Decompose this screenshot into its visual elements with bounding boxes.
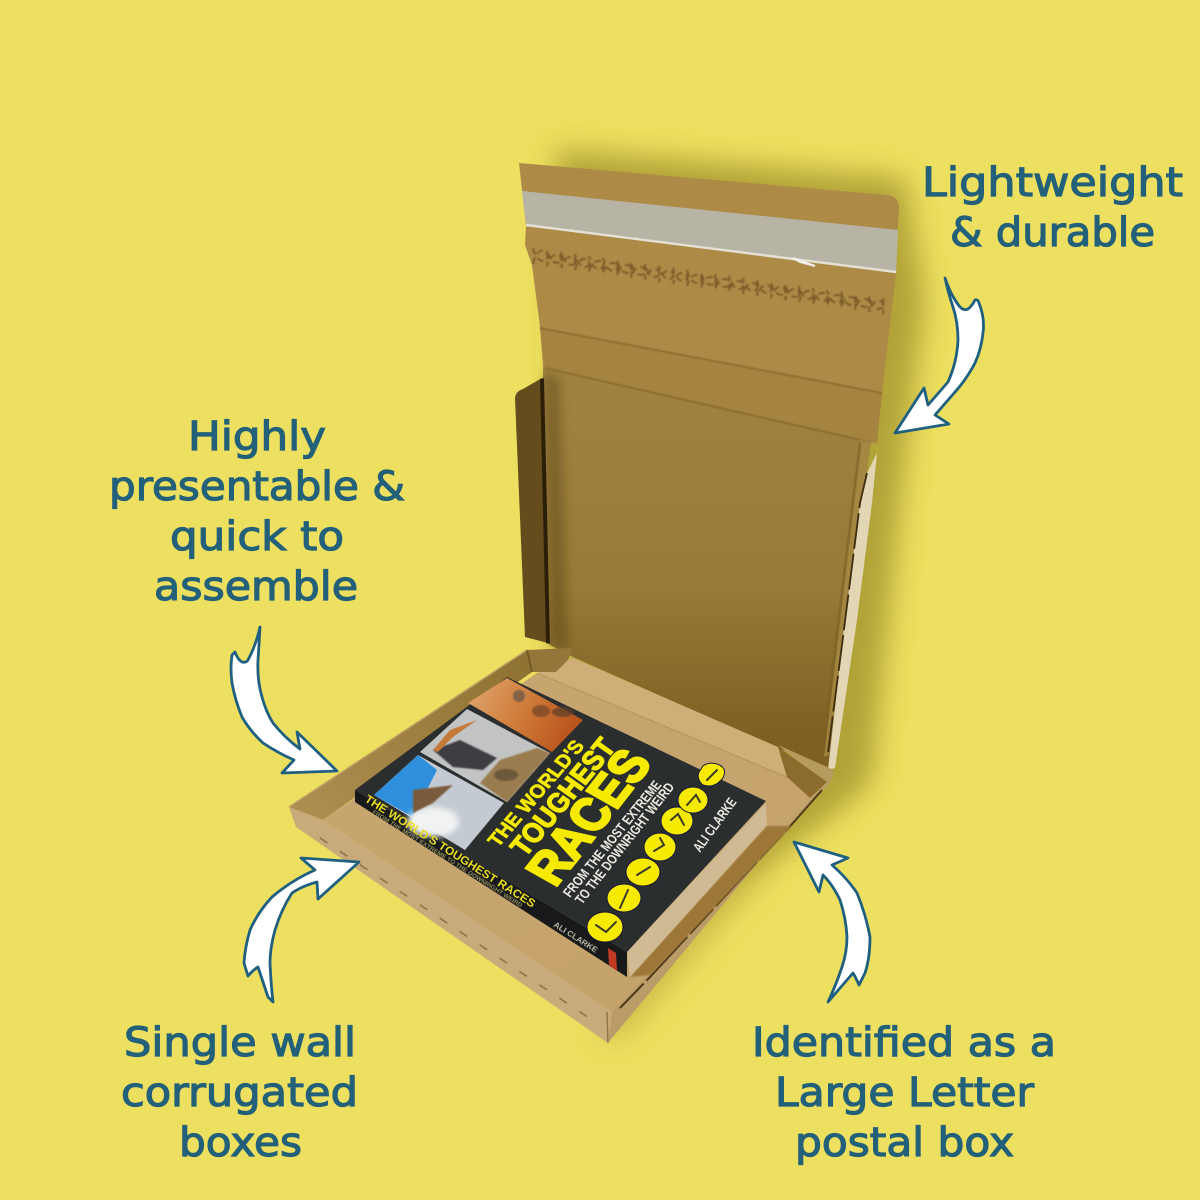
tray floor [323, 673, 830, 1012]
arrow: lightweight [895, 278, 984, 433]
RACES: RACES [515, 741, 663, 894]
label: lightweight: Lightweight [922, 160, 1183, 206]
cardboard box [289, 163, 899, 1043]
right corner tab rim [778, 745, 834, 784]
strip [828, 453, 877, 770]
back corner tab [527, 648, 572, 672]
book shadow on floor [630, 826, 792, 977]
label: large letter: Large Letter [775, 1070, 1035, 1116]
arrow: single wall [244, 858, 359, 1002]
flap body [515, 378, 548, 643]
label: presentable: Highly [188, 414, 326, 460]
label: presentable [109, 414, 405, 610]
lid main panel [543, 368, 871, 768]
page block [627, 803, 767, 977]
label: single wall: corrugated [121, 1070, 358, 1116]
label: large letter: Identified as a [752, 1020, 1056, 1066]
back flange [537, 658, 787, 777]
spine subtitle: FROM THE MOST EXTREME TO THE DOWNRIGHT WEIRD [371, 810, 523, 910]
cover title [484, 732, 663, 894]
author: ALI CLARKE [689, 795, 740, 855]
tape highlight [526, 225, 896, 272]
label: lightweight: & durable [950, 210, 1155, 256]
subtitle line 1: FROM THE MOST EXTREME [560, 778, 665, 900]
label: presentable: quick to [170, 514, 344, 560]
tear strip perforation [533, 248, 884, 314]
open lid [519, 163, 899, 768]
lid crease lines [540, 328, 882, 757]
spine author: ALI CLARKE [552, 920, 600, 955]
left inner wall [289, 650, 532, 820]
label: lightweight [922, 160, 1183, 256]
front cover [355, 677, 766, 952]
label: presentable: presentable & [109, 464, 405, 510]
lid upper fold panel [540, 328, 882, 443]
cover subtitle [560, 778, 740, 907]
cover photo: sky jumper [374, 755, 504, 850]
lid inner shadow [543, 373, 568, 650]
left side flap [515, 378, 550, 644]
spine title: THE WORLD'S TOUGHEST RACES [362, 793, 537, 911]
base tray [289, 648, 834, 1043]
white sealing tape [522, 191, 898, 273]
sport icons row [587, 763, 725, 942]
front wall perforations [320, 838, 595, 1022]
right wall [608, 771, 834, 1043]
TOUGHEST: TOUGHEST [504, 732, 622, 862]
label: large letter: postal box [795, 1120, 1014, 1166]
lid drop shadow [556, 150, 925, 900]
spine text [362, 793, 600, 955]
label: single wall: Single wall [124, 1020, 356, 1066]
left wall top rim [289, 650, 527, 807]
right wall gap line [620, 790, 822, 1008]
label: single wall: boxes [179, 1120, 302, 1166]
label: presentable: assemble [154, 564, 358, 610]
tape crease [793, 258, 815, 266]
flange crease [537, 673, 787, 777]
penguin logo [608, 948, 617, 971]
spine [355, 790, 627, 977]
THE WORLD'S: THE WORLD'S [484, 736, 589, 851]
back tab shadow [527, 650, 532, 672]
arrow: presentable [231, 627, 337, 773]
cover photo: rocky runner [420, 709, 550, 802]
lid top flap [519, 163, 899, 470]
white side edge strip [828, 453, 877, 770]
book [355, 677, 792, 977]
lid right edge band [824, 442, 870, 757]
cover photo: orange desert [468, 678, 583, 752]
label: single wall [121, 1020, 358, 1166]
tray drop shadow [600, 790, 835, 1040]
subtitle line 2: TO THE DOWNRIGHT WEIRD [572, 780, 678, 907]
flap fold shadow [540, 378, 550, 644]
label: large letter [752, 1020, 1056, 1166]
arrow: large letter [794, 842, 870, 1002]
front wall [289, 807, 612, 1043]
right corner tab [778, 747, 827, 798]
front corner fold [607, 1012, 608, 1043]
strip gap line [828, 473, 867, 753]
